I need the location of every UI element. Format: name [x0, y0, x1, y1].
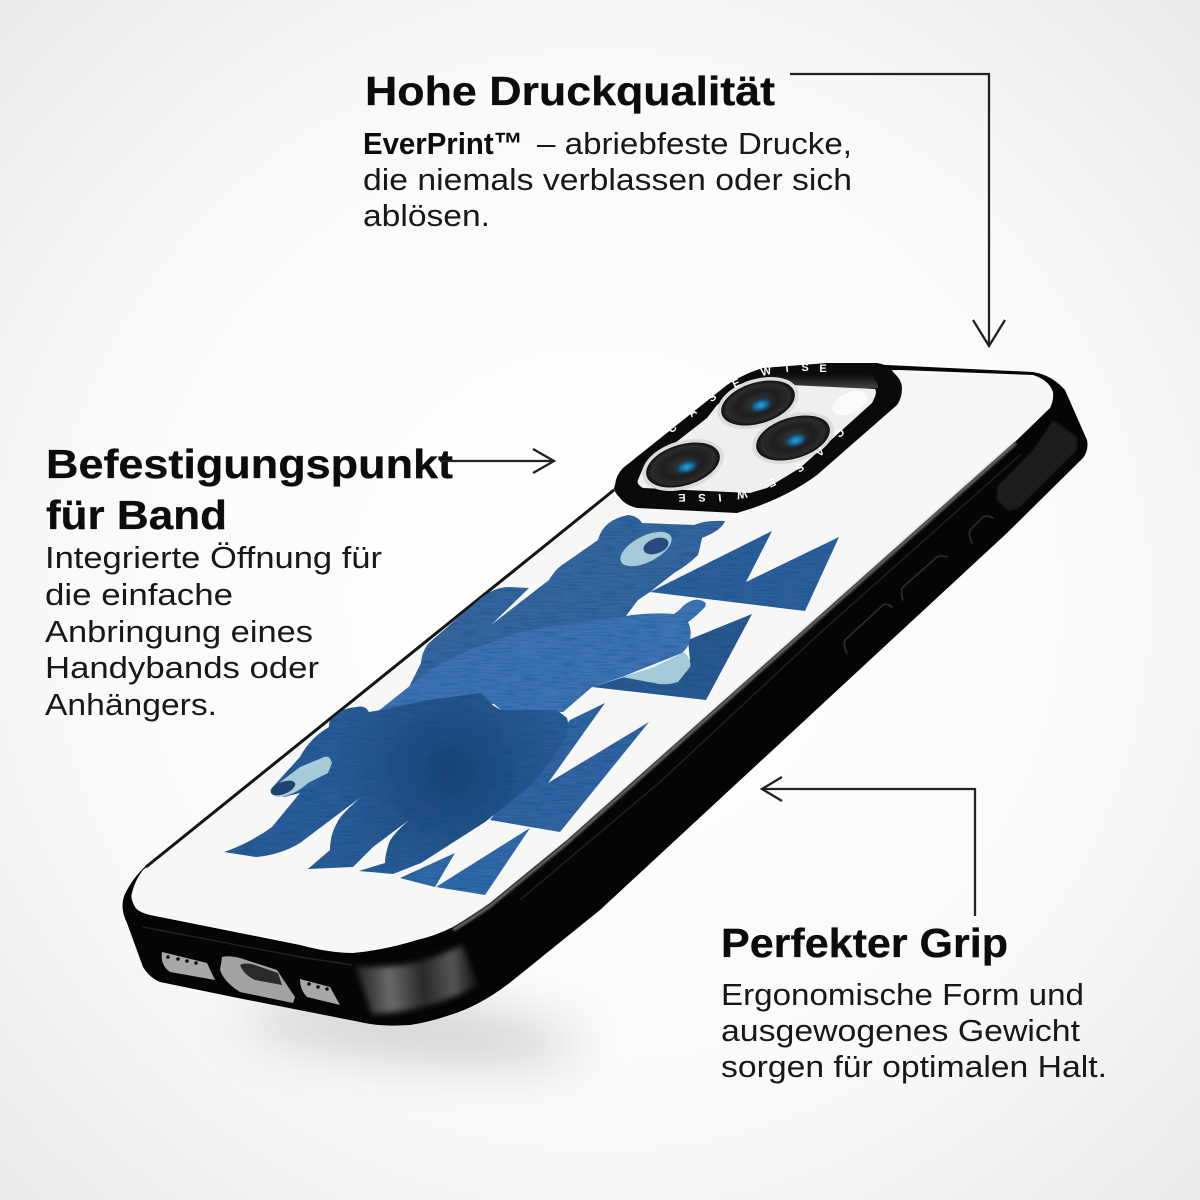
- lens right: [746, 403, 840, 473]
- heading: Befestigungspunkt: [46, 441, 453, 487]
- arrow: grip to phone side: [762, 777, 975, 916]
- bear artwork: [224, 515, 839, 895]
- callout: Perfekter Grip: [721, 920, 1107, 1084]
- white back panel: [131, 370, 1053, 953]
- body text: – abriebfeste Drucke,: [537, 126, 852, 161]
- side seam line: [520, 455, 1020, 900]
- body text: Ergonomische Form und: [721, 977, 1084, 1012]
- arrow: print quality to phone top: [790, 74, 1005, 346]
- top-left edge line: [146, 490, 614, 867]
- arrow: strap attachment point: [440, 449, 554, 473]
- ring lettering top: E: [819, 363, 827, 375]
- ring lettering bottom: A: [812, 444, 826, 458]
- speaker grille right: [300, 979, 340, 1005]
- camera island: [614, 362, 902, 513]
- body text: Anhängers.: [45, 687, 217, 722]
- body text: Handybands oder: [45, 650, 319, 685]
- body text: EverPrint™: [363, 126, 523, 161]
- ring lettering top: E: [731, 377, 742, 391]
- ring lettering top: S: [706, 391, 719, 405]
- heading: für Band: [46, 492, 227, 538]
- ring lettering top: I: [785, 363, 789, 375]
- ring lettering bottom: S: [793, 460, 806, 474]
- body text: Integrierte Öffnung für: [45, 540, 382, 575]
- ring lettering top: [666, 362, 827, 436]
- ring lettering bottom: E: [678, 491, 686, 503]
- ring lettering bottom: W: [735, 487, 748, 501]
- middle bear: [377, 600, 706, 712]
- body text: sorgen für optimalen Halt.: [721, 1049, 1107, 1084]
- body text: Anbringung eines: [45, 614, 313, 649]
- ring lettering top: A: [686, 406, 699, 420]
- phone shadow: [238, 991, 582, 1073]
- callout: Hohe Druckqualität: [363, 68, 852, 233]
- bottom seam line: [143, 927, 352, 965]
- front bear: [224, 693, 568, 874]
- body text: [45, 540, 382, 722]
- ring lettering top: C: [666, 422, 680, 436]
- ring lettering bottom: S: [698, 491, 706, 503]
- lens left: [636, 430, 730, 500]
- mountain triangles: [400, 531, 839, 895]
- ring lettering bottom: I: [718, 491, 722, 503]
- case body: [122, 365, 1088, 1026]
- body text: ablösen.: [363, 198, 490, 233]
- heading: Perfekter Grip: [721, 920, 1008, 966]
- bottom corner gloss: [355, 945, 478, 1014]
- body text: [721, 977, 1107, 1084]
- ring lettering bottom: E: [766, 475, 777, 489]
- camera glass: [638, 385, 876, 493]
- heading: [46, 441, 453, 538]
- top bear: [381, 515, 725, 710]
- ring lettering bottom: C: [832, 425, 846, 439]
- callout: Befestigungspunkt für Band: [45, 441, 453, 722]
- front bear nose: [269, 778, 297, 798]
- charging port: [220, 956, 295, 1003]
- flash: [829, 386, 871, 420]
- heading: Hohe Druckqualität: [365, 68, 775, 114]
- body text: [363, 126, 852, 233]
- speaker grille left: [162, 952, 215, 980]
- ring lettering top: S: [801, 362, 809, 374]
- rim highlight: [453, 443, 1016, 930]
- camera control button: [997, 420, 1077, 511]
- lens top: [711, 368, 805, 438]
- ring lettering top: W: [760, 365, 773, 379]
- body text: die einfache: [45, 577, 233, 612]
- inner band: [745, 375, 878, 392]
- body text: die niemals verblassen oder sich: [363, 162, 852, 197]
- camera ring: [614, 363, 902, 513]
- phone case: [122, 365, 1088, 1026]
- top bear eye: [615, 525, 677, 573]
- front bear muzzle: [270, 757, 332, 797]
- ring lettering bottom: [678, 425, 846, 503]
- body text: ausgewogenes Gewicht: [721, 1013, 1080, 1048]
- middle bear snout: [622, 652, 690, 684]
- side buttons: [844, 516, 993, 653]
